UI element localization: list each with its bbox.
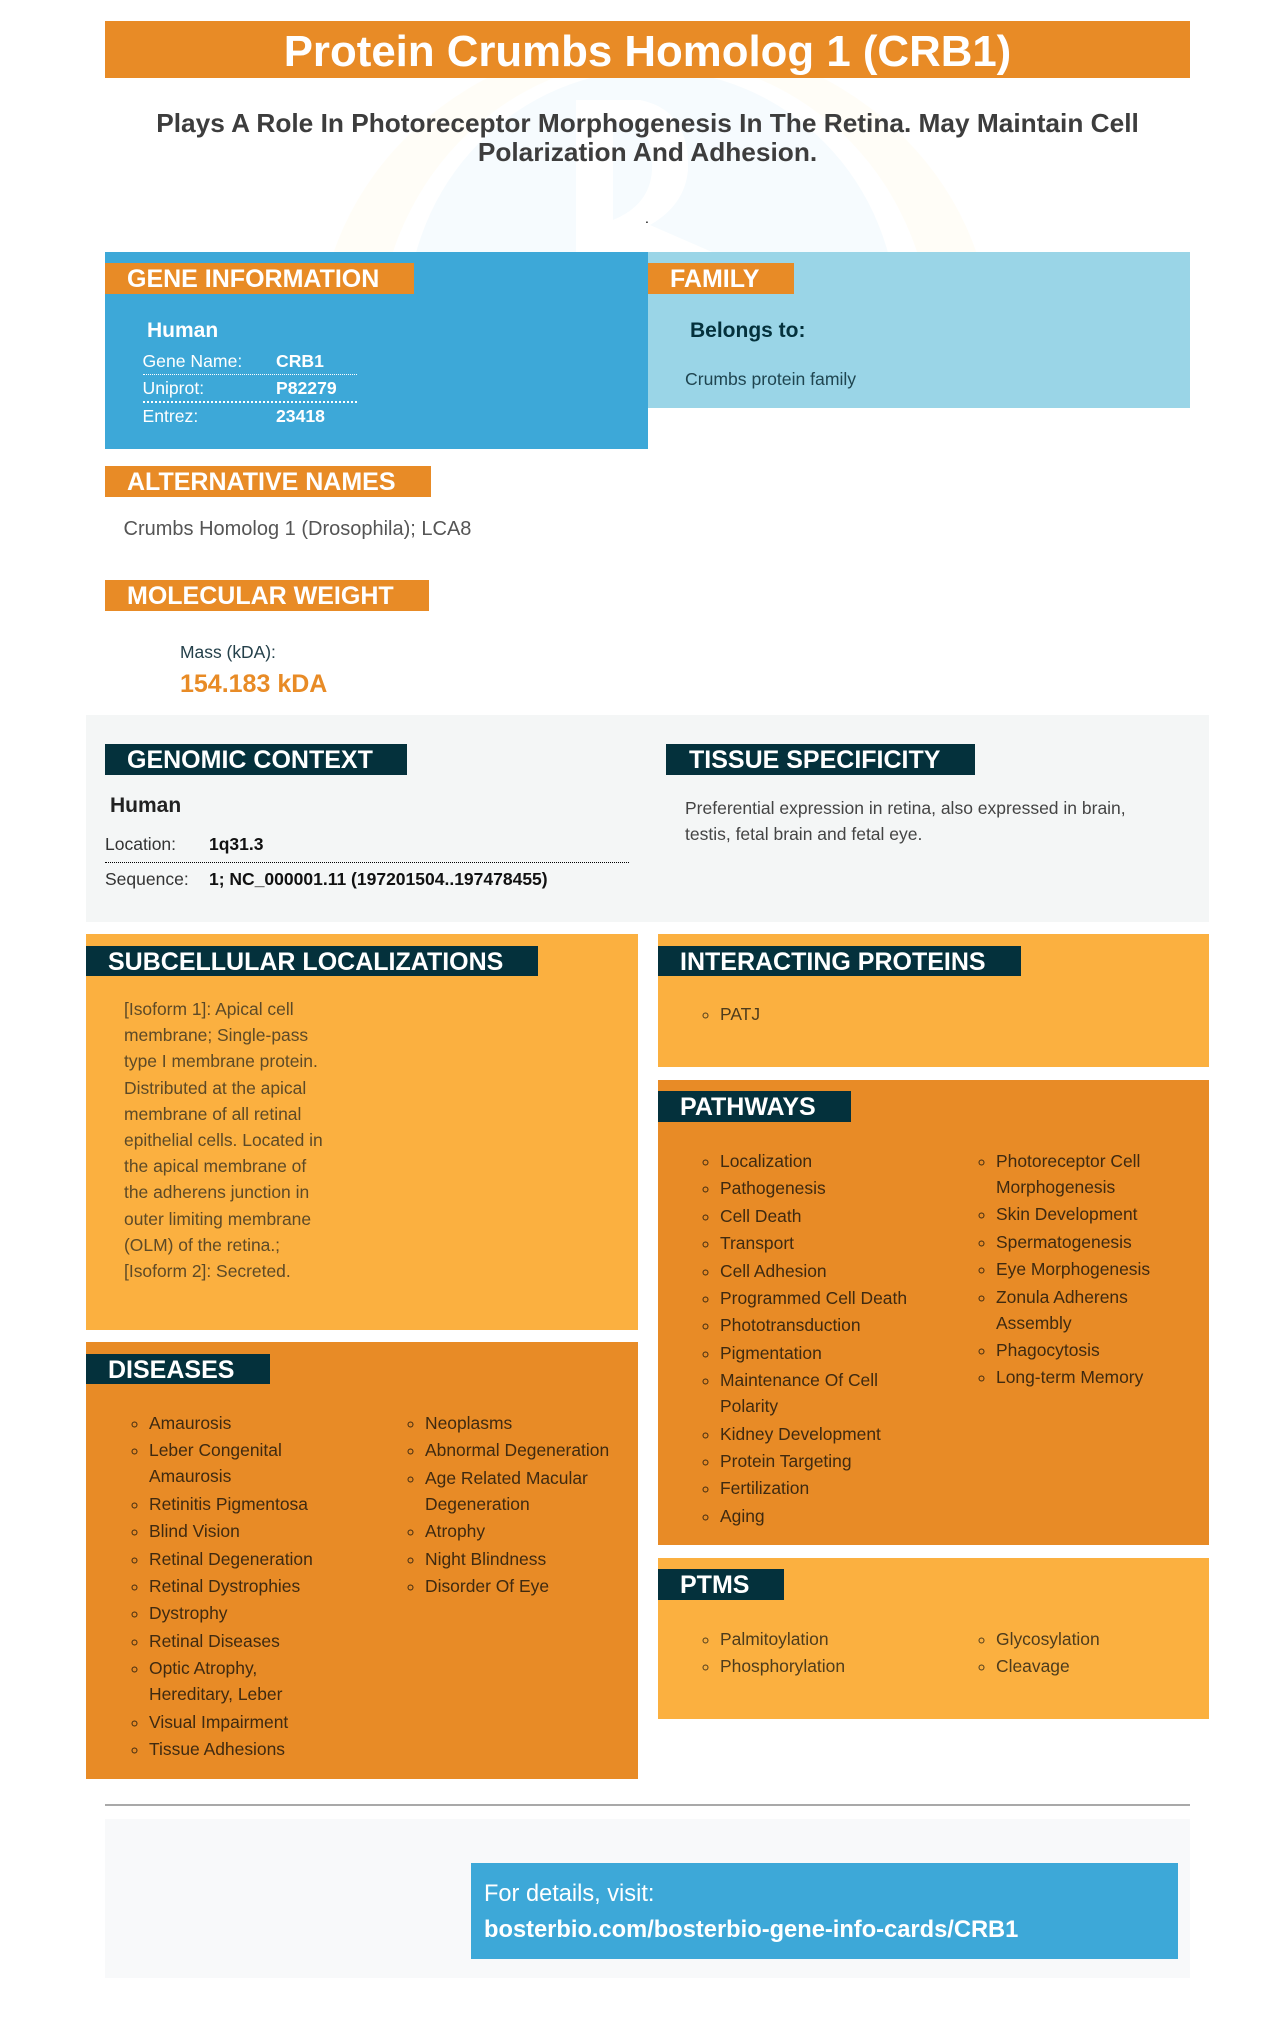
species label: Human bbox=[147, 319, 218, 342]
heading: tissue specificity: TISSUE SPECIFICITY bbox=[689, 746, 940, 774]
list: diseases column 1: Hereditary, Leber bbox=[149, 1684, 282, 1704]
list: pathways column 1: Polarity bbox=[720, 1396, 778, 1416]
heading: ptms: PTMS bbox=[680, 1571, 749, 1599]
callout url: bosterbio.com/bosterbio-gene-info-cards/CRB1 bbox=[484, 1917, 1018, 1943]
subcellular localizations text: the apical membrane of bbox=[124, 1156, 306, 1176]
panel: family bbox=[648, 252, 1190, 408]
subcellular localizations text: (OLM) of the retina.; bbox=[124, 1235, 280, 1255]
list: pathways column 1: Aging bbox=[720, 1506, 765, 1526]
list: diseases column 1: Visual Impairment bbox=[149, 1712, 288, 1732]
list: diseases column 1: Retinitis Pigmentosa bbox=[149, 1494, 308, 1514]
species label: Human bbox=[110, 794, 181, 817]
gene details table: Entrez: bbox=[142, 406, 198, 426]
panel: genomic context and tissue specificity bbox=[86, 715, 1209, 922]
list: pathways column 2: Assembly bbox=[996, 1313, 1072, 1333]
list: ptms column 2 bbox=[978, 1629, 1100, 1676]
heading: pathways: PATHWAYS bbox=[680, 1093, 816, 1121]
subcellular localizations text: membrane; Single-pass bbox=[124, 1025, 308, 1045]
list: diseases column 2: Night Blindness bbox=[425, 1549, 546, 1569]
list: diseases column 1: Blind Vision bbox=[149, 1521, 240, 1541]
belongs to label: Belongs to: bbox=[690, 319, 806, 342]
list: diseases column 1: Retinal Degeneration bbox=[149, 1549, 313, 1569]
list: pathways column 2: Photoreceptor Cell bbox=[996, 1151, 1140, 1171]
panel: subcellular localizations bbox=[86, 934, 638, 1330]
list: pathways column 2: Spermatogenesis bbox=[996, 1232, 1132, 1252]
heading: interacting proteins: INTERACTING PROTEINS bbox=[680, 948, 986, 976]
list: pathways column 1: Pigmentation bbox=[720, 1343, 822, 1363]
gene details table: 23418 bbox=[276, 406, 325, 426]
heading: gene information: GENE INFORMATION bbox=[127, 265, 379, 293]
panel: diseases bbox=[86, 1342, 638, 1779]
list: pathways column 2 bbox=[978, 1151, 1150, 1387]
heading: molecular weight: MOLECULAR WEIGHT bbox=[127, 582, 394, 610]
list: diseases column 1: Dystrophy bbox=[149, 1603, 228, 1623]
list: ptms column 2: Glycosylation bbox=[996, 1629, 1100, 1649]
panel: pathways bbox=[658, 1080, 1209, 1545]
gene details table: P82279 bbox=[276, 378, 337, 398]
list: diseases column 1: Retinal Diseases bbox=[149, 1631, 280, 1651]
tissue specificity text bbox=[685, 798, 1126, 844]
list: diseases column 1: Optic Atrophy, bbox=[149, 1658, 257, 1678]
list: pathways column 1: Kidney Development bbox=[720, 1424, 881, 1444]
list: diseases column 1: Retinal Dystrophies bbox=[149, 1576, 300, 1596]
tissue specificity text: Preferential expression in retina, also expressed in brain, bbox=[685, 798, 1126, 818]
list: diseases column 2: Neoplasms bbox=[425, 1413, 512, 1433]
panel: interacting proteins bbox=[658, 934, 1209, 1067]
heading: pathways bbox=[658, 1091, 851, 1122]
panel: ptms bbox=[658, 1558, 1209, 1719]
subcellular localizations text: [Isoform 1]: Apical cell bbox=[124, 999, 294, 1019]
list: pathways column 1: Maintenance Of Cell bbox=[720, 1370, 878, 1390]
list: pathways column 1: Pathogenesis bbox=[720, 1178, 826, 1198]
list: diseases column 1: Tissue Adhesions bbox=[149, 1739, 285, 1759]
location row: 1q31.3 bbox=[209, 834, 263, 854]
list: diseases column 2: Abnormal Degeneration bbox=[425, 1440, 609, 1460]
list: pathways column 1: Localization bbox=[720, 1151, 812, 1171]
list: pathways column 1: Fertilization bbox=[720, 1478, 809, 1498]
heading: family: FAMILY bbox=[670, 265, 759, 293]
list: diseases column 2: Age Related Macular bbox=[425, 1468, 588, 1488]
subtitle: Polarization And Adhesion. bbox=[478, 137, 817, 167]
sequence row: 1; NC_000001.11 (197201504..197478455) bbox=[209, 869, 548, 889]
heading: diseases: DISEASES bbox=[108, 1356, 234, 1384]
family name: Crumbs protein family bbox=[685, 369, 856, 389]
list: interacting proteins: PATJ bbox=[720, 1004, 760, 1024]
subcellular localizations text: Distributed at the apical bbox=[124, 1078, 306, 1098]
list: pathways column 1: Phototransduction bbox=[720, 1315, 861, 1335]
subtitle bbox=[156, 108, 1139, 167]
subcellular localizations text: [Isoform 2]: Secreted. bbox=[124, 1261, 291, 1281]
list: diseases column 2: Atrophy bbox=[425, 1521, 485, 1541]
list: pathways column 2: Eye Morphogenesis bbox=[996, 1259, 1150, 1279]
subcellular localizations text: the adherens junction in bbox=[124, 1182, 309, 1202]
subcellular localizations text bbox=[124, 999, 323, 1281]
list: pathways column 1: Transport bbox=[720, 1233, 794, 1253]
heading: ptms bbox=[658, 1569, 784, 1600]
subcellular localizations text: epithelial cells. Located in bbox=[124, 1130, 323, 1150]
small dot: . bbox=[645, 210, 649, 226]
subtitle: Plays A Role In Photoreceptor Morphogenesis In The Retina. May Maintain Cell bbox=[156, 108, 1139, 138]
panel: gene information bbox=[105, 252, 648, 449]
list: pathways column 2: Zonula Adherens bbox=[996, 1287, 1128, 1307]
gene details table: Uniprot: bbox=[142, 378, 204, 398]
list: pathways column 2: Long-term Memory bbox=[996, 1367, 1143, 1387]
title: Protein Crumbs Homolog 1 (CRB1) bbox=[284, 27, 1011, 76]
subcellular localizations text: membrane of all retinal bbox=[124, 1104, 301, 1124]
list: pathways column 1: Cell Adhesion bbox=[720, 1261, 827, 1281]
list: pathways column 1 bbox=[702, 1151, 907, 1526]
gene details table bbox=[142, 351, 357, 426]
list: diseases column 1: Amaurosis bbox=[149, 1413, 231, 1433]
gene details table: Gene Name: bbox=[142, 351, 242, 371]
sequence row: Sequence: bbox=[105, 869, 189, 889]
callout: details link bbox=[471, 1863, 1178, 1959]
list: ptms column 2: Cleavage bbox=[996, 1656, 1070, 1676]
subcellular localizations text: type I membrane protein. bbox=[124, 1051, 318, 1071]
subcellular localizations text: outer limiting membrane bbox=[124, 1209, 311, 1229]
list: pathways column 1: Cell Death bbox=[720, 1206, 801, 1226]
list: diseases column 2: Degeneration bbox=[425, 1494, 530, 1514]
mass value: 154.183 kDA bbox=[180, 670, 327, 698]
list: diseases column 1: Amaurosis bbox=[149, 1466, 231, 1486]
list: pathways column 2: Skin Development bbox=[996, 1204, 1138, 1224]
list: diseases column 1 bbox=[132, 1413, 313, 1759]
location row: Location: bbox=[105, 834, 176, 854]
panel: footer bbox=[105, 1819, 1190, 1978]
list: ptms column 1: Palmitoylation bbox=[720, 1629, 829, 1649]
list: diseases column 1: Leber Congenital bbox=[149, 1440, 282, 1460]
alternative names text: Crumbs Homolog 1 (Drosophila); LCA8 bbox=[124, 518, 471, 540]
list: pathways column 1: Protein Targeting bbox=[720, 1451, 852, 1471]
list: pathways column 2: Phagocytosis bbox=[996, 1340, 1100, 1360]
list: diseases column 2 bbox=[408, 1413, 609, 1596]
list: diseases column 2: Disorder Of Eye bbox=[425, 1576, 549, 1596]
list: ptms column 1: Phosphorylation bbox=[720, 1656, 845, 1676]
gene details table: CRB1 bbox=[276, 351, 324, 371]
heading: family bbox=[648, 263, 794, 294]
heading: alternative names: ALTERNATIVE NAMES bbox=[127, 468, 396, 496]
watermark logo bbox=[416, 78, 888, 252]
tissue specificity text: testis, fetal brain and fetal eye. bbox=[685, 824, 922, 844]
title bbox=[105, 21, 1190, 78]
mass label: Mass (kDA): bbox=[180, 642, 276, 662]
heading: subcellular localizations: SUBCELLULAR LOCALIZATIONS bbox=[108, 948, 503, 976]
heading: genomic context: GENOMIC CONTEXT bbox=[127, 746, 373, 774]
callout label: For details, visit: bbox=[484, 1881, 654, 1907]
list: ptms column 1 bbox=[702, 1629, 845, 1676]
location row bbox=[105, 834, 263, 854]
list: pathways column 1: Programmed Cell Death bbox=[720, 1288, 907, 1308]
heading: diseases bbox=[86, 1354, 270, 1384]
list: pathways column 2: Morphogenesis bbox=[996, 1177, 1115, 1197]
